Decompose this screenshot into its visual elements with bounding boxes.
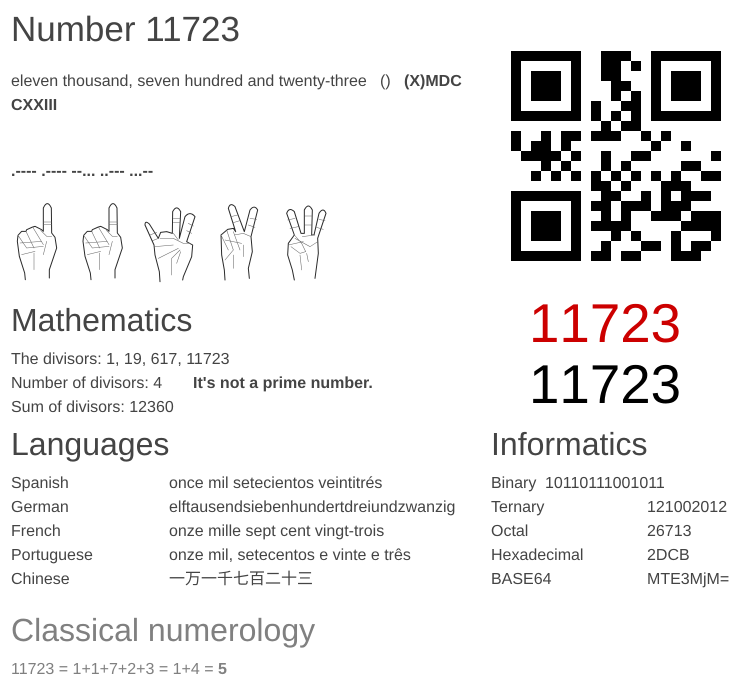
big number red: 11723: [529, 292, 681, 354]
QR code: [511, 51, 721, 261]
languages table: [11, 475, 455, 588]
morse code: .---- .---- --... ..--- ...--: [11, 163, 153, 180]
informatics table: 10110111001011: [545, 475, 665, 492]
informatics table: [491, 475, 729, 588]
big number black: 11723: [529, 353, 681, 415]
informatics table: Octal: [491, 523, 528, 540]
icon: hand one: [83, 204, 122, 280]
languages table: onze mil, setecentos e vinte e três: [169, 547, 411, 564]
number in words and roman numeral: (): [380, 73, 391, 90]
informatics table: 121002012: [647, 499, 727, 516]
informatics table: Binary: [491, 475, 536, 492]
number in words and roman numeral: CXXIII: [11, 97, 57, 114]
icon: hand one: [17, 204, 57, 280]
number in words and roman numeral: (X)MDC: [404, 73, 462, 90]
languages table: Chinese: [11, 571, 70, 588]
languages table: 一万一千七百二十三: [169, 571, 313, 588]
mathematics facts: Sum of divisors: 12360: [11, 399, 174, 416]
languages table: elftausendsiebenhundertdreiundzwanzig: [169, 499, 455, 516]
languages table: German: [11, 499, 69, 516]
heading: languages: Languages: [11, 426, 169, 462]
informatics table: MTE3MjM=: [647, 571, 729, 588]
number in words and roman numeral: eleven thousand, seven hundred and twenty-three: [11, 73, 367, 90]
mathematics facts: Number of divisors: 4: [11, 375, 162, 392]
title: Number 11723: [11, 10, 240, 49]
languages table: Spanish: [11, 475, 69, 492]
mathematics facts: It's not a prime number.: [193, 375, 373, 392]
numerology calculation: 11723 = 1+1+7+2+3 = 1+4 = 5: [11, 661, 227, 678]
informatics table: Hexadecimal: [491, 547, 583, 564]
informatics table: 2DCB: [647, 547, 690, 564]
heading: mathematics: Mathematics: [11, 302, 192, 338]
icon: hand two fingers: [221, 205, 258, 280]
languages table: onze mille sept cent vingt-trois: [169, 523, 384, 540]
sign language hands: [16, 203, 326, 282]
informatics table: 26713: [647, 523, 692, 540]
languages table: once mil setecientos veintitrés: [169, 475, 382, 492]
mathematics facts: The divisors: 1, 19, 617, 11723: [11, 351, 230, 368]
heading: classical numerology: Classical numerology: [11, 612, 315, 648]
informatics table: Ternary: [491, 499, 544, 516]
languages table: French: [11, 523, 61, 540]
number in words and roman numeral: [11, 73, 462, 114]
icon: hand three fingers: [287, 206, 326, 280]
mathematics facts: [11, 351, 373, 416]
languages table: Portuguese: [11, 547, 93, 564]
icon: hand three fingers with thumb out: [145, 208, 195, 282]
informatics table: BASE64: [491, 571, 551, 588]
heading: informatics: Informatics: [491, 426, 647, 462]
